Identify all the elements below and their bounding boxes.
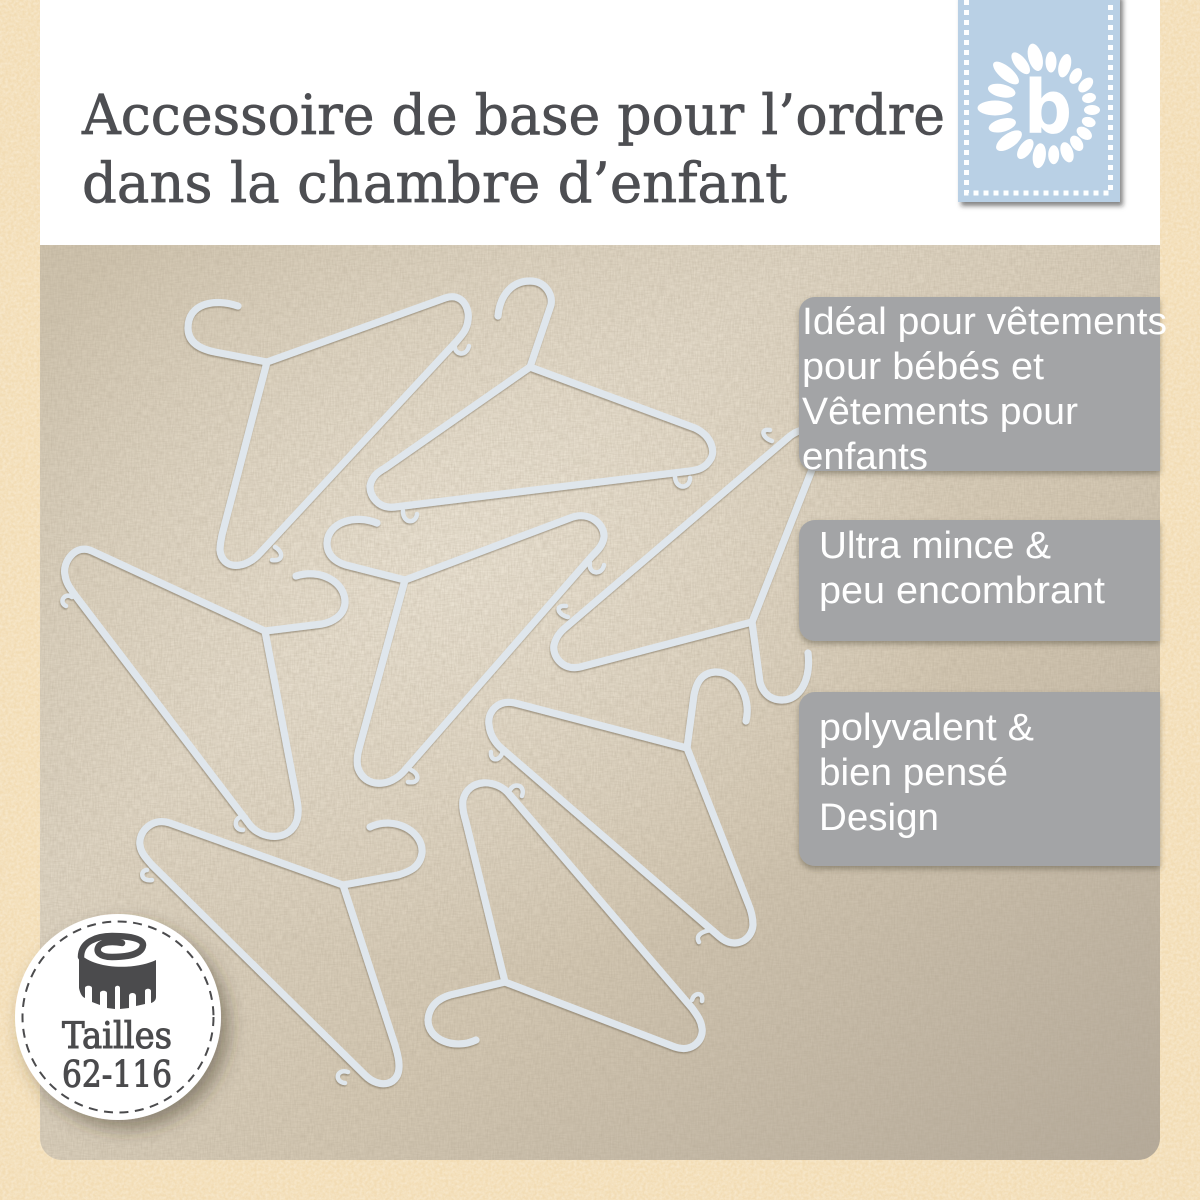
panel: ideal for baby clothes: enfants bbox=[802, 436, 928, 478]
hanger 4 bbox=[62, 549, 345, 836]
hanger 6 bbox=[489, 672, 753, 943]
title bbox=[81, 83, 945, 215]
hanger 3 bbox=[327, 516, 604, 783]
panel: versatile design bbox=[799, 692, 1160, 866]
icon: flower logo bbox=[978, 42, 1100, 169]
hangers photo bbox=[62, 281, 820, 1084]
title: dans la chambre d’enfant bbox=[82, 151, 787, 215]
hanger 7 bbox=[428, 783, 702, 1049]
hanger 5 bbox=[554, 430, 820, 700]
hanger 1 bbox=[188, 297, 469, 565]
panel: ideal for baby clothes bbox=[799, 297, 1167, 478]
fabric photo panel bbox=[40, 245, 1160, 1160]
panel: ideal for baby clothes: Idéal pour vêtements bbox=[802, 301, 1167, 343]
title: Accessoire de base pour l’ordre bbox=[81, 83, 945, 147]
panel: ideal for baby clothes: Vêtements pour bbox=[802, 391, 1078, 433]
brand tag bbox=[958, 0, 1120, 202]
size badge bbox=[15, 914, 221, 1120]
white header band bbox=[40, 0, 1160, 245]
panel: versatile design: bien pensé bbox=[819, 752, 1008, 794]
panel: ultra thin: Ultra mince & bbox=[819, 525, 1051, 567]
panel: ultra thin bbox=[799, 520, 1160, 641]
hanger 2 bbox=[370, 281, 713, 521]
hanger 8 bbox=[140, 822, 422, 1084]
panel: versatile design: Design bbox=[819, 797, 939, 839]
badge text bbox=[62, 1016, 172, 1096]
panel: versatile design: polyvalent & bbox=[819, 707, 1034, 749]
icon: flower logo: b bbox=[1024, 65, 1072, 151]
panel: ideal for baby clothes: pour bébés et bbox=[802, 346, 1044, 388]
panel: ultra thin: peu encombrant bbox=[819, 570, 1105, 612]
badge text: Tailles bbox=[62, 1016, 172, 1057]
badge text: 62-116 bbox=[62, 1055, 172, 1096]
icon: measuring tape roll bbox=[79, 936, 156, 1009]
